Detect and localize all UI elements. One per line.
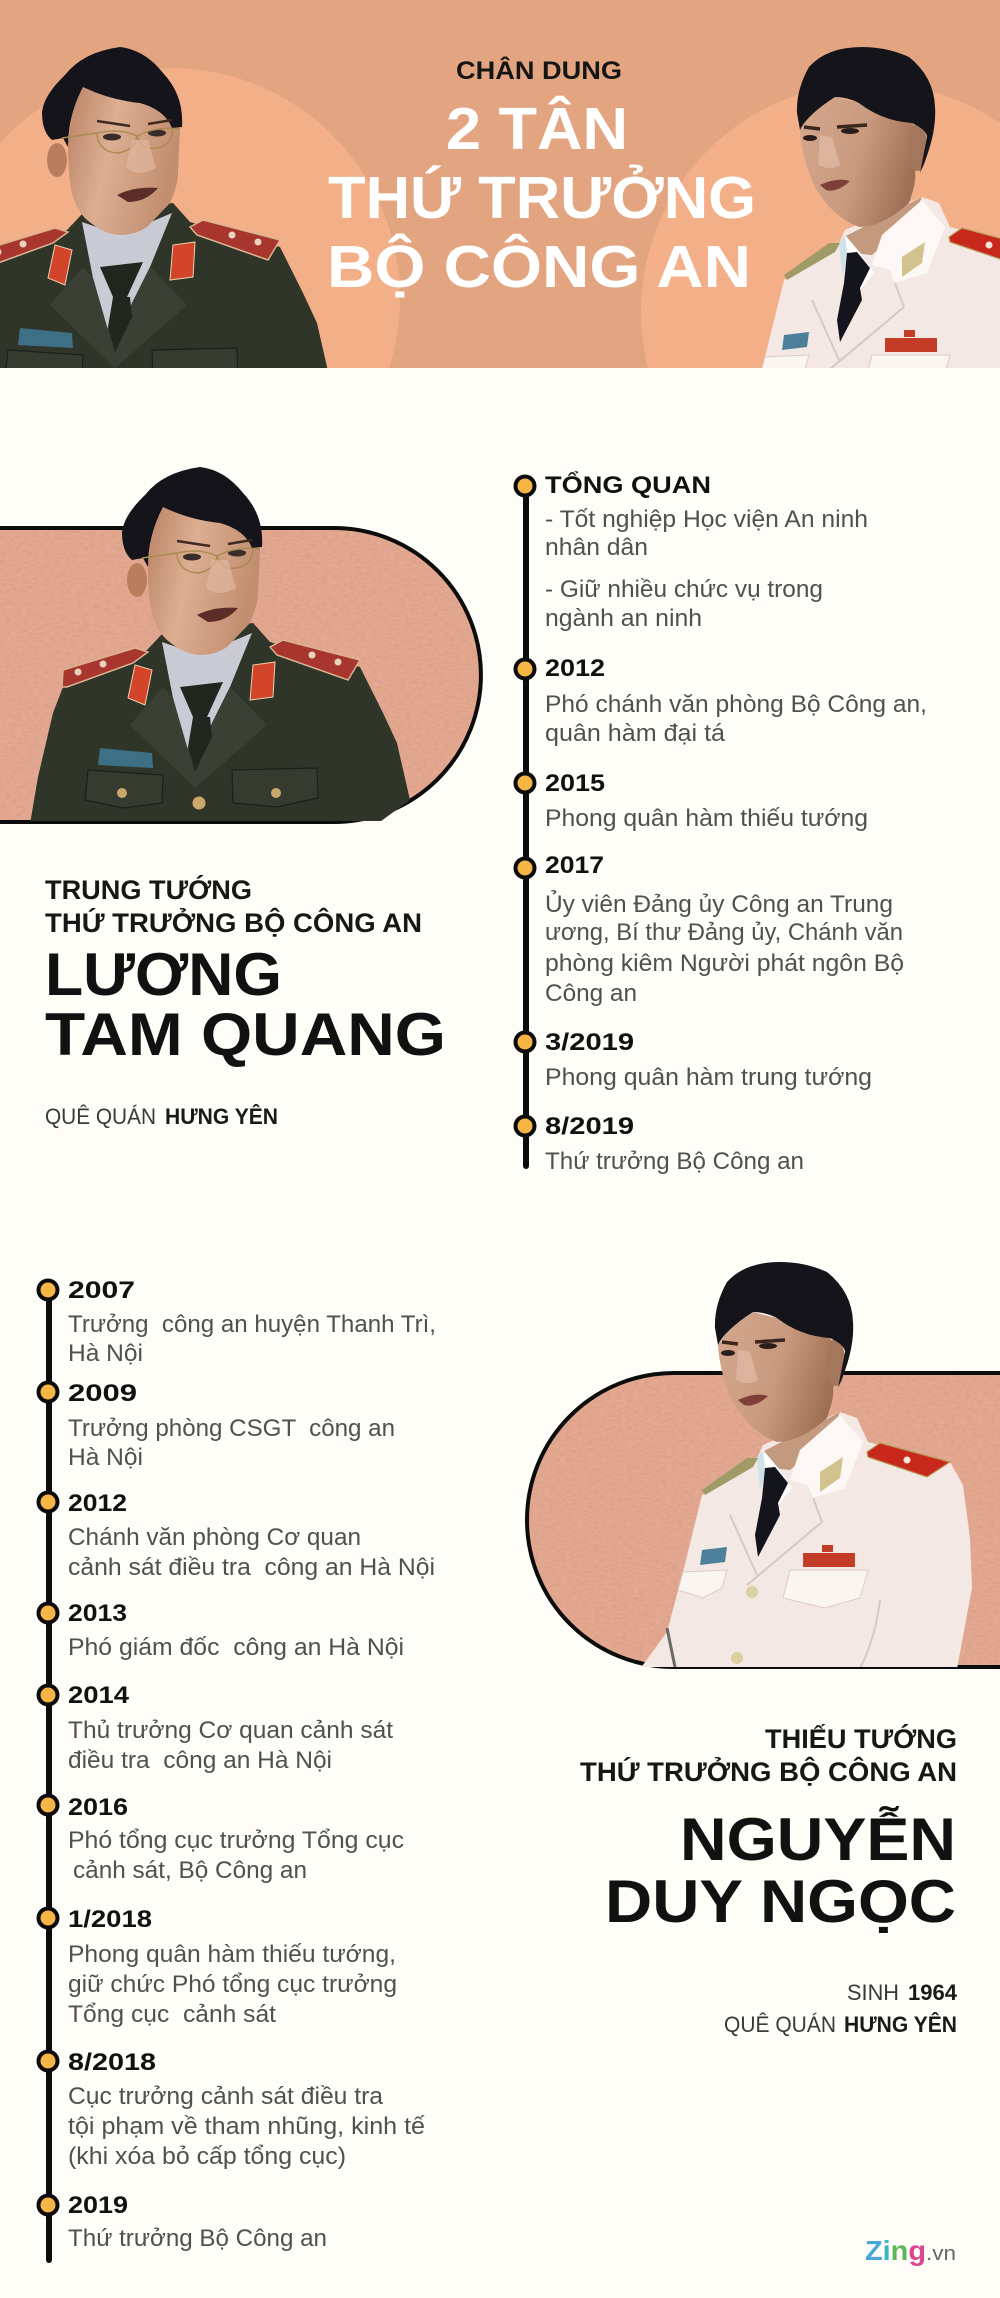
header portrait: Lương Tam Quang: [0, 47, 328, 368]
entry: 1/2018: 1/2018: [68, 1906, 152, 1933]
header portrait: Nguyễn Duy Ngọc: [762, 47, 1000, 368]
logo: Zing.vn: .vn: [926, 2243, 956, 2265]
text block: Lương Tam Quang: TRUNG TƯỚNG: [45, 874, 252, 905]
entry: 1/2018: Tổng cục cảnh sát: [68, 2001, 276, 2028]
entry: 1/2018: Phong quân hàm thiếu tướng,: [68, 1941, 396, 1968]
entry: 3/2019: Phong quân hàm trung tướng: [545, 1064, 872, 1091]
timeline: Nguyễn Duy Ngọc: [38, 1277, 436, 2263]
text block: Nguyễn Duy Ngọc: DUY NGỌC: [605, 1868, 956, 1935]
entry: 2017: Công an: [545, 980, 637, 1007]
entry: tổng quan: - Giữ nhiều chức vụ trong: [545, 576, 823, 603]
text block: Nguyễn Duy Ngọc: THỨ TRƯỞNG BỘ CÔNG AN: [580, 1755, 957, 1787]
entry: 2014: [68, 1682, 393, 1774]
entry: 2017: [545, 852, 904, 1007]
text block: Lương Tam Quang: HƯNG YÊN: [165, 1104, 278, 1129]
entry: 2015: Phong quân hàm thiếu tướng: [545, 805, 868, 832]
entry: 2012: quân hàm đại tá: [545, 720, 726, 747]
header title: BỘ CÔNG AN: [327, 233, 751, 300]
entry: 8/2018: (khi xóa bỏ cấp tổng cục): [68, 2143, 346, 2170]
panel: Nguyễn Duy Ngọc portrait: [520, 1262, 1000, 1669]
header arch right: [641, 92, 1000, 368]
text block: Nguyễn Duy Ngọc: 1964: [908, 1980, 958, 2005]
entry: 2016: [68, 1794, 404, 1884]
header texture: [0, 0, 1000, 368]
entry: 2012: 2012: [545, 655, 605, 682]
portrait: [30, 467, 410, 824]
panel texture: [0, 528, 490, 822]
logo: Zing.vn: Zing: [865, 2235, 926, 2266]
entry: 2013: 2013: [68, 1600, 127, 1627]
entry: 3/2019: 3/2019: [545, 1029, 634, 1056]
text block: Lương Tam Quang: TAM QUANG: [45, 1001, 446, 1068]
entry: 2016: cảnh sát, Bộ Công an: [73, 1857, 307, 1884]
entry: tổng quan: ngành an ninh: [545, 605, 702, 632]
entry: 2009: Hà Nội: [68, 1444, 143, 1471]
entry: 2019: [68, 2192, 327, 2252]
entry: 2015: [545, 770, 868, 832]
entry: 2007: [68, 1277, 436, 1367]
text block: Lương Tam Quang: QUÊ QUÁN: [45, 1104, 156, 1129]
entry: 2012: Chánh văn phòng Cơ quan: [68, 1524, 361, 1551]
text block: Nguyễn Duy Ngọc: HƯNG YÊN: [844, 2012, 957, 2037]
entry: tổng quan: [545, 471, 868, 632]
entry: tổng quan: - Tốt nghiệp Học viện An ninh: [545, 506, 868, 533]
entry: 2007: 2007: [68, 1277, 135, 1304]
text block: Lương Tam Quang: [45, 874, 446, 1129]
text block: Nguyễn Duy Ngọc: QUÊ QUÁN: [724, 2012, 836, 2037]
entry: 8/2018: 8/2018: [68, 2049, 156, 2076]
entry: 2012: cảnh sát điều tra công an Hà Nội: [68, 1554, 435, 1581]
header title: [327, 95, 756, 300]
text block: Lương Tam Quang: THỨ TRƯỞNG BỘ CÔNG AN: [45, 906, 422, 938]
entry: 2013: Phó giám đốc công an Hà Nội: [68, 1634, 404, 1661]
entry: 2014: 2014: [68, 1682, 130, 1709]
entry: 2017: 2017: [545, 852, 604, 879]
entry: 2009: Trưởng phòng CSGT công an: [68, 1415, 395, 1442]
logo: Zing.vn: [865, 2235, 956, 2266]
entry: 2017: Ủy viên Đảng ủy Công an Trung: [545, 889, 893, 918]
panel texture: [520, 1373, 1000, 1667]
text block: Nguyễn Duy Ngọc: THIẾU TƯỚNG: [765, 1723, 957, 1754]
timeline: Lương Tam Quang: [516, 471, 927, 1175]
entry: 2009: 2009: [68, 1380, 137, 1407]
entry: 2012: Phó chánh văn phòng Bộ Công an,: [545, 691, 927, 718]
entry: 2017: phòng kiêm Người phát ngôn Bộ: [545, 950, 904, 977]
entry: 2019: 2019: [68, 2192, 128, 2219]
entry: 8/2019: 8/2019: [545, 1113, 634, 1140]
header kicker: CHÂN DUNG: [456, 55, 622, 85]
text block: Nguyễn Duy Ngọc: NGUYỄN: [680, 1806, 956, 1873]
entry: 2016: 2016: [68, 1794, 128, 1821]
entry: 8/2018: [68, 2049, 426, 2170]
entry: 8/2018: tội phạm về tham nhũng, kinh tế: [68, 2113, 426, 2140]
text block: Nguyễn Duy Ngọc: SINH: [847, 1980, 899, 2005]
header arch left: [0, 68, 400, 368]
entry: 8/2019: [545, 1113, 804, 1175]
entry: 2007: Hà Nội: [68, 1340, 143, 1367]
entry: 1/2018: giữ chức Phó tổng cục trưởng: [68, 1971, 397, 1998]
entry: tổng quan: TỔNG QUAN: [545, 471, 711, 499]
entry: 2009: [68, 1380, 395, 1471]
entry: 2012: [545, 655, 927, 747]
entry: tổng quan: nhân dân: [545, 534, 648, 561]
entry: 2013: [68, 1600, 404, 1661]
timeline dots: [516, 476, 534, 1136]
entry: 3/2019: [545, 1029, 872, 1091]
panel: Lương Tam Quang portrait: [0, 467, 490, 824]
entry: 2015: 2015: [545, 770, 605, 797]
text block: Lương Tam Quang: LƯƠNG: [45, 941, 282, 1008]
header title: THỨ TRƯỞNG: [328, 164, 756, 231]
entry: 2016: Phó tổng cục trưởng Tổng cục: [68, 1827, 404, 1854]
timeline dots: [38, 1280, 58, 2214]
entry: 2012: [68, 1490, 435, 1581]
entry: 2017: ương, Bí thư Đảng ủy, Chánh văn: [545, 919, 903, 946]
header title: 2 TÂN: [446, 95, 628, 162]
entry: 2014: Thủ trưởng Cơ quan cảnh sát: [68, 1717, 393, 1744]
entry: 2014: điều tra công an Hà Nội: [68, 1747, 332, 1774]
entry: 2007: Trưởng công an huyện Thanh Trì,: [68, 1311, 436, 1338]
text block: Nguyễn Duy Ngọc: [580, 1723, 958, 2037]
entry: 8/2019: Thứ trưởng Bộ Công an: [545, 1148, 804, 1175]
entry: 2019: Thứ trưởng Bộ Công an: [68, 2225, 327, 2252]
panel: header banner: [0, 0, 1000, 368]
entry: 2012: 2012: [68, 1490, 127, 1517]
entry: 1/2018: [68, 1906, 397, 2028]
portrait: [640, 1262, 972, 1669]
entry: 8/2018: Cục trưởng cảnh sát điều tra: [68, 2083, 384, 2110]
